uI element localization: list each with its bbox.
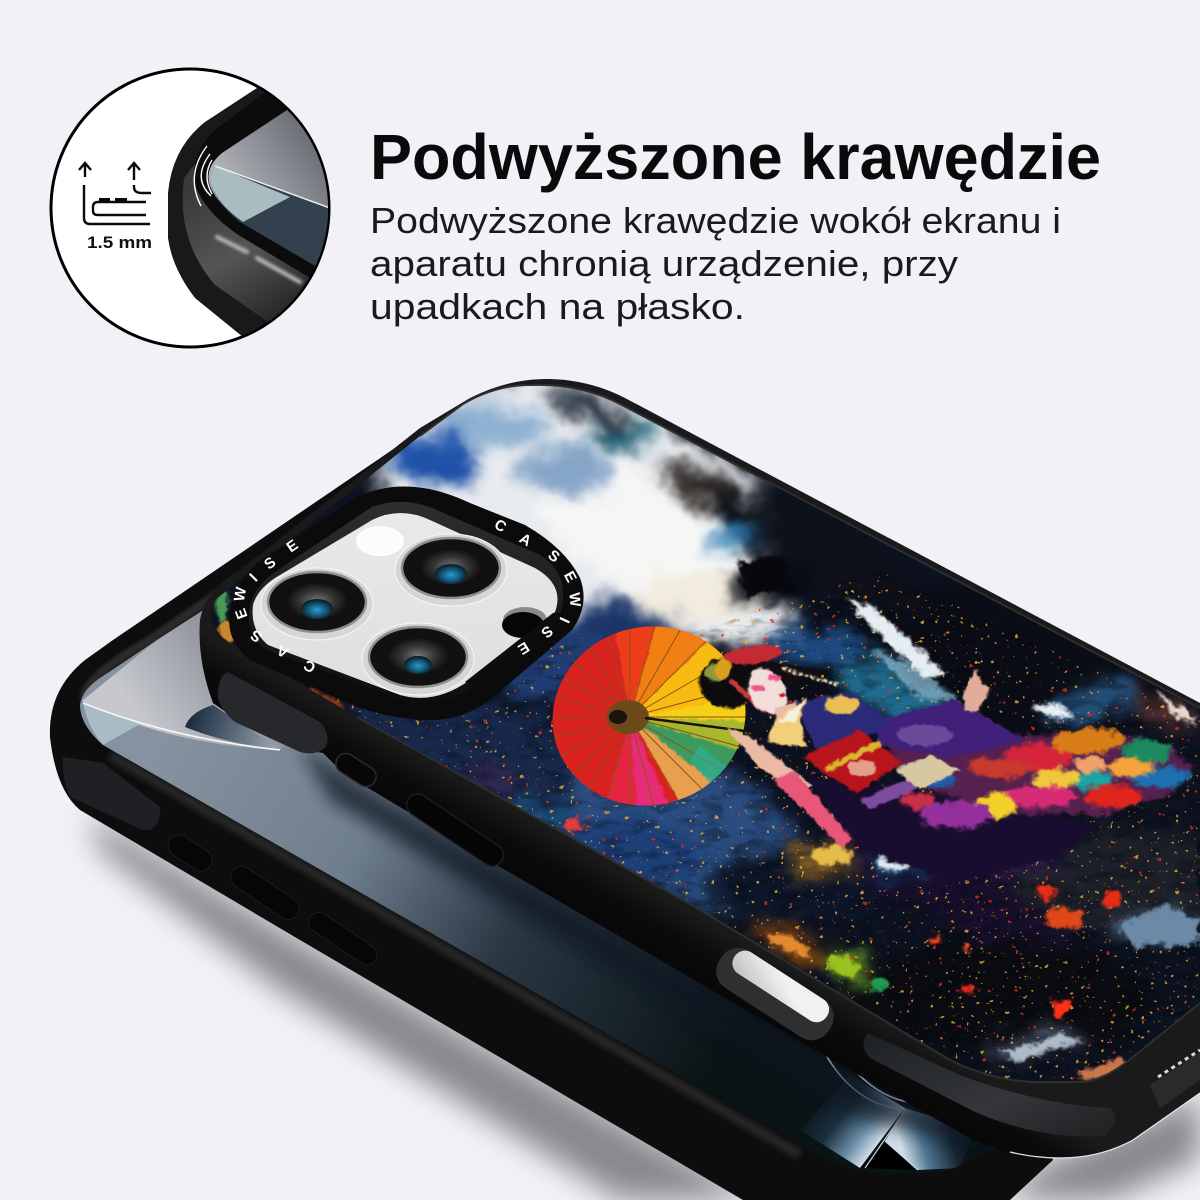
camera inner wall	[249, 502, 563, 703]
brand text: CASEWISE: A	[516, 530, 534, 550]
inset phone corner	[168, 88, 340, 340]
dark mottling and paint flecks	[217, 574, 1200, 1080]
hand right	[964, 668, 990, 712]
umbrella hub	[607, 700, 649, 734]
cast shadow	[90, 815, 1200, 1200]
side buttons lower case	[164, 831, 381, 969]
umbrella spokes	[552, 626, 746, 806]
arm	[727, 728, 812, 794]
flash	[356, 526, 404, 556]
rim edge highlights	[1010, 1093, 1200, 1158]
brand text: CASEWISE: E	[232, 606, 251, 621]
face	[746, 666, 788, 716]
hair	[699, 656, 759, 708]
brand text: CASEWISE: C	[301, 656, 319, 676]
lidar sensor	[502, 607, 547, 638]
brand text: CASEWISE: I	[246, 570, 261, 585]
brand text: CASEWISE: E	[515, 638, 532, 658]
brand text: CASEWISE: W	[231, 585, 250, 603]
case back artwork: painted scene	[200, 360, 1200, 1100]
label: 1.5 mm: 1.5 mm	[87, 233, 152, 252]
brand text: CASEWISE: I	[555, 614, 573, 625]
neck	[774, 699, 800, 720]
collar	[767, 697, 807, 747]
brand text: CASEWISE: A	[274, 641, 292, 661]
side buttons upper case	[332, 750, 508, 870]
carbon grip patch lower	[63, 757, 160, 830]
impact arcs	[194, 146, 212, 206]
phone: upper case back	[200, 379, 1200, 1158]
art rim	[357, 385, 1200, 1082]
camera module	[229, 486, 584, 720]
geisha figure	[699, 642, 1025, 848]
brand text: CASEWISE	[231, 516, 584, 676]
brand text: CASEWISE: C	[491, 516, 509, 536]
camera bezel	[229, 486, 584, 720]
brand text: CASEWISE: S	[247, 626, 265, 646]
colorful skirt band	[882, 728, 1195, 815]
sleeve purple	[872, 700, 1025, 758]
phone: lower case seen from the screen side	[50, 431, 1053, 1200]
phone screen	[80, 610, 993, 1174]
kimono top	[795, 692, 890, 750]
brand text: CASEWISE: E	[560, 568, 580, 585]
brand text: CASEWISE: S	[261, 554, 279, 573]
shadow of upper phone on the screen	[300, 745, 1000, 1150]
brand text: CASEWISE: E	[283, 536, 301, 556]
icon: silver side button	[709, 940, 841, 1048]
bezel strip over lidar	[465, 612, 566, 690]
inset circle: raised edge detail	[51, 69, 340, 347]
lens: left	[261, 568, 373, 640]
dark skirt	[805, 775, 1100, 880]
obi	[803, 730, 903, 793]
fine details: waterfall, rocks, petals, skirt	[215, 555, 1200, 1082]
brand text: CASEWISE: S	[545, 547, 563, 566]
brand text: CASEWISE: S	[538, 622, 556, 641]
screen wallpaper glow	[800, 1075, 905, 1168]
hair ornaments	[722, 644, 784, 667]
pink sleeve	[773, 772, 852, 848]
sky, clouds and background paint	[320, 360, 1200, 1065]
body text: upadkach na płasko.	[370, 286, 745, 327]
heading: Podwyższone krawędzie	[370, 121, 1101, 193]
brand text: CASEWISE: W	[565, 592, 584, 608]
lens: bottom	[362, 623, 474, 695]
body text: aparatu chronią urządzenie, przy	[370, 243, 958, 284]
body text: Podwyższone krawędzie wokół ekranu i	[370, 200, 1061, 241]
umbrella	[552, 626, 760, 806]
lens: top right	[395, 534, 507, 606]
body text	[370, 200, 1061, 327]
port on corner	[1150, 1052, 1200, 1108]
camera glass	[253, 513, 558, 698]
icon: 1.5 mm raised lip	[79, 163, 151, 224]
carbon grip patches	[863, 1033, 1115, 1136]
